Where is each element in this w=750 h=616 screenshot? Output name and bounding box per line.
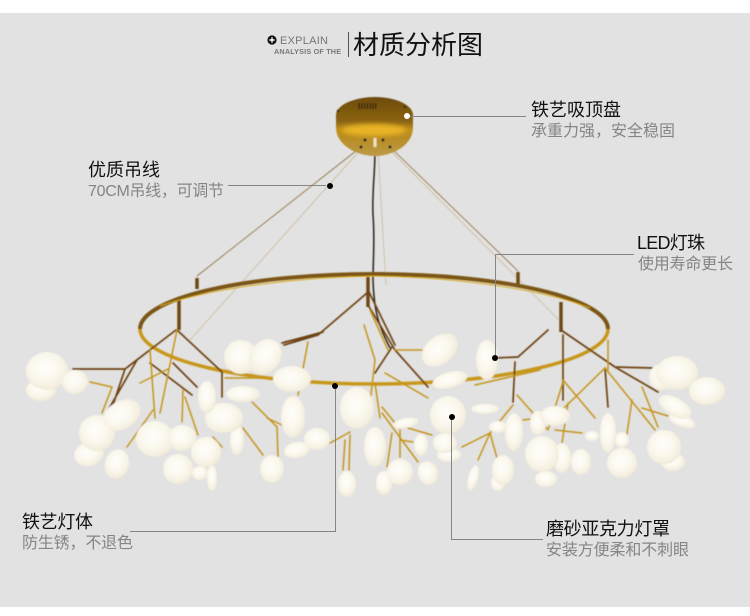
- branches centre cluster: [284, 292, 432, 467]
- english heading: EXPLAIN: [280, 35, 328, 47]
- callout heading: iron body: 铁艺灯体: [22, 512, 93, 532]
- callout heading: LED: LED灯珠: [637, 233, 705, 253]
- chinese title: 材质分析图: [353, 30, 483, 60]
- callout text: LED: 使用寿命更长: [638, 255, 733, 273]
- callout heading: wire: 优质吊线: [88, 160, 160, 180]
- callout: LED beads: [492, 233, 733, 361]
- callout text: iron body: 防生锈，不退色: [22, 534, 133, 552]
- ring hanging posts: [179, 272, 561, 332]
- callout heading: canopy: 铁艺吸顶盘: [531, 100, 621, 120]
- callout: hanging wire: [88, 160, 333, 200]
- gold ring: [140, 274, 608, 384]
- callout heading: shade: 磨砂亚克力灯罩: [546, 519, 670, 539]
- callout text: shade: 安装方便柔和不刺眼: [546, 541, 689, 559]
- english subheading: ANALYSIS OF THE: [274, 47, 341, 56]
- ceiling canopy: [336, 97, 413, 156]
- callout: ceiling canopy: [404, 100, 675, 140]
- callout: acrylic shade: [449, 414, 689, 559]
- callout text: canopy: 承重力强，安全稳固: [531, 122, 675, 140]
- branches right cluster: [462, 330, 668, 460]
- callout: iron body: [22, 383, 338, 552]
- callout text: wire: 70CM吊线，可调节: [88, 182, 224, 200]
- chandelier illustration: [26, 97, 725, 497]
- suspension wires: [190, 147, 560, 348]
- branches left cluster: [73, 330, 350, 470]
- title block: [267, 30, 483, 60]
- frosted acrylic shades: [26, 327, 725, 497]
- icon: plus badge: [267, 35, 277, 45]
